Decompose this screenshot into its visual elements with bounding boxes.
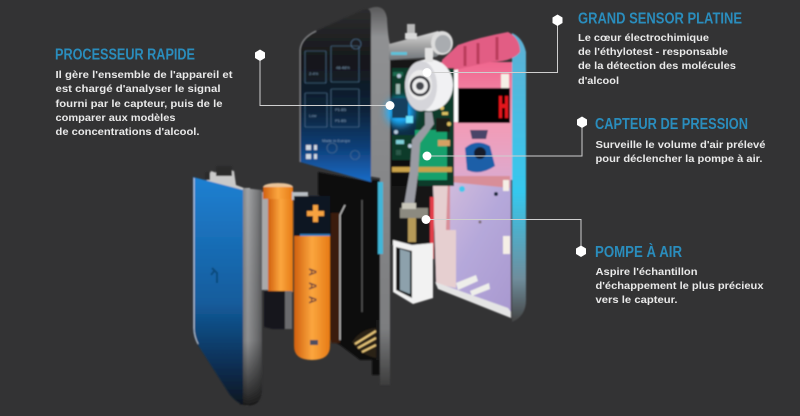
dark cavity behind the internals	[390, 60, 433, 245]
air pump	[393, 240, 433, 304]
front panel with control diagram: Made in Europe	[322, 138, 351, 143]
right shell body	[430, 62, 512, 318]
text block: pompe a air	[595, 242, 764, 306]
text block: processeur rapide: fourni par le capteur, puis de le	[56, 98, 223, 110]
heading: processeur rapide: PROCESSEUR RAPIDE	[55, 46, 195, 64]
front panel with control diagram	[300, 9, 371, 182]
text block: grand sensor platine: de l'éthylotest - responsable	[578, 46, 728, 58]
front panel with control diagram: 48-48%	[336, 65, 350, 70]
text block: capteur de pression: Surveille le volume d'air prélevé	[596, 139, 766, 151]
rollers	[456, 275, 490, 296]
back cover with blue shell	[193, 166, 268, 406]
cyan inner edge	[378, 182, 383, 254]
battery: front AAA	[294, 196, 330, 360]
front panel with control diagram: P1-B5	[335, 118, 347, 123]
right shell cyan edge	[512, 33, 526, 322]
connector line: pompe a air	[422, 215, 586, 257]
tube ribs	[465, 37, 497, 66]
battery: rear AAA	[263, 183, 308, 329]
device exploded view	[193, 7, 526, 406]
text block: grand sensor platine: d'alcool	[578, 75, 619, 87]
connector line: processeur	[255, 50, 394, 110]
text block: capteur de pression	[595, 116, 766, 165]
text block: grand sensor platine: de la détection des molécules	[578, 60, 736, 72]
text block: capteur de pression: pour déclencher la pompe à air.	[596, 153, 763, 165]
text block: processeur rapide: de concentrations d'alcool.	[56, 126, 200, 138]
text block: pompe a air: vers le capteur.	[596, 294, 678, 306]
circuit board	[392, 68, 454, 186]
heading: pompe a air: POMPE À AIR	[595, 242, 682, 261]
battery: front AAA: AAA	[306, 268, 318, 310]
text block: processeur rapide	[55, 46, 233, 138]
text block: pompe a air: Aspire l'échantillon	[596, 266, 698, 278]
side edge of front housing	[368, 7, 390, 385]
processor glow	[386, 98, 414, 126]
text block: processeur rapide: est chargé d'analyser le signal	[56, 83, 221, 95]
connector line: capteur de pression	[422, 116, 587, 160]
blue pressure component	[465, 130, 495, 172]
silver tube	[389, 24, 453, 60]
spring contact	[352, 320, 380, 360]
connector and brass post	[400, 203, 428, 242]
front panel with control diagram: P1-B5	[335, 107, 347, 112]
heading: grand sensor platine: GRAND SENSOR PLATINE	[578, 10, 742, 28]
metal arm	[404, 112, 434, 205]
front panel with control diagram: Low	[309, 113, 316, 118]
pink air tube	[442, 32, 520, 70]
text block: grand sensor platine: Le cœur électrochimique	[578, 32, 709, 44]
front housing dark compartment	[318, 172, 380, 375]
platinum sensor disc	[405, 48, 453, 111]
text block: pompe a air: d'échappement le plus précieux	[596, 280, 764, 292]
text block: grand sensor platine	[578, 10, 742, 87]
text block: processeur rapide: comparer aux modèles	[56, 112, 176, 124]
text block: processeur rapide: Il gère l'ensemble de l'appareil et	[56, 69, 233, 81]
heading: capteur de pression: CAPTEUR DE PRESSION	[595, 116, 748, 133]
front panel with control diagram: 2-4%	[309, 71, 319, 76]
connector line: grand sensor	[422, 14, 562, 77]
